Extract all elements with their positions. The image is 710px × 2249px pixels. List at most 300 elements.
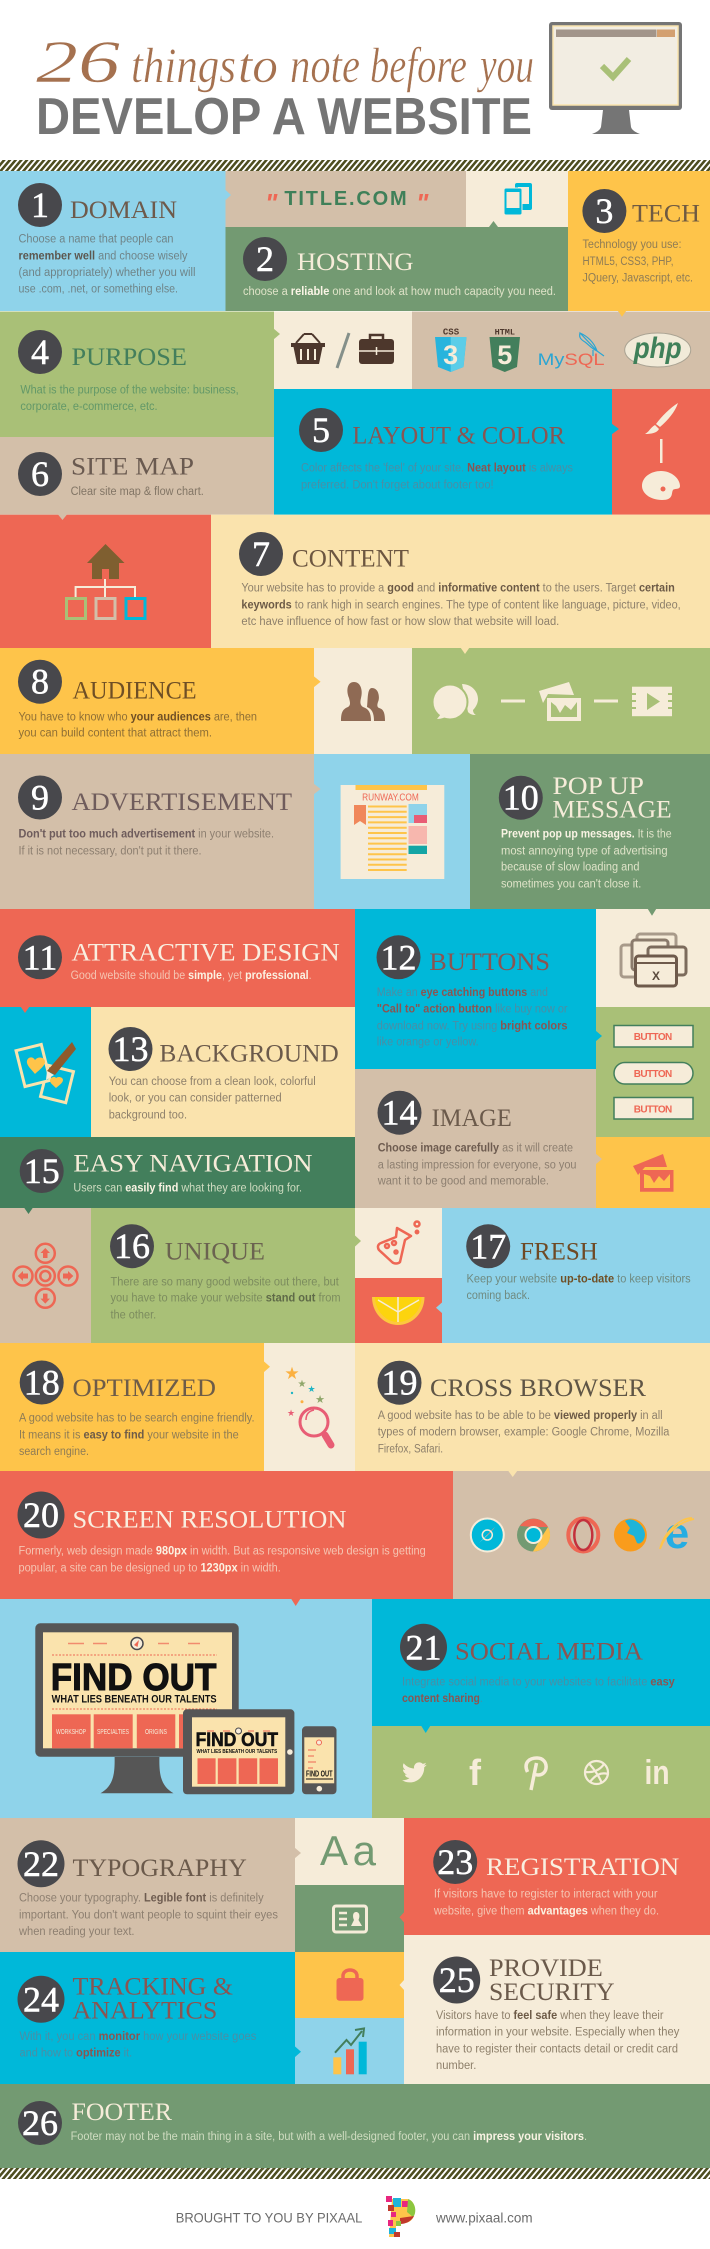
text: background body: background too. — [109, 1109, 187, 1121]
heading: cross browser: CROSS BROWSER — [430, 1375, 646, 1402]
heading: social media: SOCIAL MEDIA — [455, 1638, 643, 1665]
arrow: security left — [400, 1980, 404, 1990]
text: fresh body: coming back. — [466, 1290, 530, 1302]
arrow: purpose right — [274, 328, 280, 340]
arrow: image right — [596, 1154, 602, 1164]
icon: monitor with check mark — [549, 22, 682, 134]
heading: attractive design: ATTRACTIVE DESIGN — [72, 940, 340, 967]
icon: css3 — [435, 328, 466, 372]
heading: buttons: BUTTONS — [429, 949, 550, 976]
heading: site map: SITE MAP — [71, 453, 194, 480]
panel: lemon icon — [355, 1278, 442, 1343]
bottom striped divider — [0, 2168, 710, 2179]
icon: facebook: f — [469, 1752, 482, 1793]
arrow: hosting to phones — [489, 221, 498, 227]
number badge 3: 3 — [595, 191, 613, 231]
icon: stars: ★ — [298, 1379, 307, 1390]
title line: 26 things to note before you: things — [131, 37, 236, 93]
text: image body: want it to be good and memorable. — [377, 1175, 549, 1187]
device: desktop monitor: FIND OUT — [51, 1657, 217, 1699]
text: unique body: you have to make your website stand out from — [110, 1293, 341, 1305]
text: cross browser body: types of modern browser, example: Google Chrome, Mozilla — [378, 1427, 670, 1439]
icon: chrome — [517, 1518, 550, 1552]
panel: 2 hosting — [226, 227, 568, 311]
device: desktop monitor — [35, 1623, 239, 1793]
text: unique body: There are so many good website out there, but — [110, 1276, 340, 1288]
icon: linkedin: in — [644, 1754, 670, 1792]
icon: people — [341, 682, 385, 721]
text: easy navigation body: Users can easily find what they are looking for. — [73, 1183, 302, 1195]
panel: purpose icons — [274, 312, 412, 389]
text: image body: Choose image carefully as it will create — [378, 1143, 573, 1155]
number badge 6 — [18, 452, 62, 496]
arrow: domain to title — [225, 190, 231, 200]
text: image body: a lasting impression for everyone, so you — [378, 1159, 576, 1171]
text: screen resolution body: Formerly, web design made 980px in width. But as responsive web design is getting — [18, 1546, 426, 1558]
device: desktop monitor: ORIGINS — [145, 1729, 167, 1736]
text: cross browser body: A good website has to be able to be viewed properly in all — [378, 1410, 663, 1422]
arrow: registration left — [400, 1912, 404, 1923]
icon: image — [633, 1154, 674, 1192]
number badge 20: 20 — [23, 1495, 59, 1535]
arrow: optimized right — [264, 1361, 270, 1372]
panel: 13 background — [91, 1007, 355, 1137]
text: domain body: use .com, .net, or something else. — [18, 284, 178, 296]
icon: navigation arrows — [14, 1244, 78, 1308]
panel: 4 purpose — [0, 312, 274, 437]
icon: stars: ★ — [315, 1394, 325, 1406]
panel: button samples — [596, 1007, 710, 1137]
panel: image icon — [596, 1137, 710, 1208]
heading: purpose: PURPOSE — [72, 344, 187, 371]
number badge 2: 2 — [256, 239, 274, 279]
connector line — [660, 439, 662, 463]
text: buttons body: "Call to" action button like buy now or — [377, 1004, 568, 1016]
device: tablet: FIND OUT — [196, 1730, 278, 1751]
text: title.com: " — [416, 188, 429, 218]
text: tech body: Technology you use: — [582, 239, 682, 251]
icon: web page with ads — [341, 785, 444, 879]
number badge 13: 13 — [112, 1029, 148, 1069]
number badge 2 — [243, 237, 287, 281]
panel: 12 buttons — [355, 909, 596, 1069]
title line: 26 things to note before you: before — [370, 37, 467, 93]
icon: php: php — [633, 332, 682, 365]
panel: search icon — [264, 1343, 355, 1471]
panel: 25 provide security — [404, 1935, 710, 2084]
text: domain body: remember well and choose wisely — [18, 250, 188, 262]
number badge 24: 24 — [23, 1979, 59, 2019]
arrow: attractive down — [20, 1006, 30, 1013]
text: background body — [109, 1076, 316, 1121]
title line: 26 things to note before you — [36, 29, 534, 95]
panel: 7 content — [211, 515, 710, 648]
icon: stars: ★ — [284, 1364, 300, 1383]
text: fresh body — [466, 1273, 691, 1302]
icon: flask — [378, 1222, 420, 1264]
text: pop up body — [501, 829, 672, 890]
panel: 21 social media — [372, 1599, 710, 1726]
text: layout body: preferred. Don't forget about footer too! — [301, 479, 494, 491]
text: pop up body: most annoying type of advertising — [501, 845, 668, 857]
panel: 23 registration — [404, 1818, 710, 1935]
heading: registration: REGISTRATION — [486, 1854, 679, 1881]
text: typography body — [18, 1893, 278, 1938]
text: domain body: (and appropriately) whether you will — [18, 267, 196, 279]
text: social media body — [402, 1677, 675, 1705]
heading: background: BACKGROUND — [159, 1041, 339, 1068]
icon: image — [539, 682, 581, 721]
icon: mysql: MySQL — [538, 350, 605, 369]
icon: site map tree — [66, 544, 145, 618]
panel: 5 layout and color — [274, 389, 612, 515]
title line: 26 things to note before you: 26 — [36, 29, 120, 95]
heading: unique: UNIQUE — [165, 1238, 265, 1265]
icon: lemon slice — [372, 1297, 424, 1325]
text: advertisement body: If it is not necessary, don't put it there. — [18, 845, 202, 857]
arrow: tracking right — [294, 2046, 301, 2058]
text: fresh body: Keep your website up-to-date to keep visitors — [466, 1273, 691, 1285]
text: social media body: Integrate social media to your websites to facilitate easy — [402, 1677, 675, 1689]
panel: brush and palette icons — [612, 389, 710, 515]
text: optimized body — [19, 1413, 254, 1458]
icon: video — [632, 687, 672, 716]
button sample 3: BUTTON — [634, 1104, 672, 1116]
text: typography body: important. You don't want people to squint their eyes — [19, 1909, 278, 1921]
text: typography body: when reading your text. — [18, 1926, 134, 1938]
text: screen resolution body: popular, a site can be designed up to 1230px in width. — [18, 1562, 281, 1574]
number badge 10: 10 — [503, 778, 539, 818]
text: optimized body: search engine. — [19, 1446, 89, 1458]
icon: brush — [645, 403, 678, 434]
icon: basket — [291, 334, 325, 364]
number badge 6: 6 — [31, 454, 49, 494]
panel: 14 image — [355, 1069, 596, 1208]
number badge 14: 14 — [382, 1093, 418, 1133]
heading: optimized: OPTIMIZED — [72, 1375, 216, 1402]
text: layout body — [301, 463, 573, 491]
text: site map body: Clear site map & flow chart. — [71, 486, 204, 498]
dash — [501, 700, 525, 702]
icon: web page with ads: RUNWAY.COM — [362, 792, 419, 804]
number badge 3 — [582, 189, 626, 233]
text: content body — [241, 583, 681, 628]
panel: 6 site map — [0, 437, 274, 515]
text: pop up body: sometimes you can't close it. — [501, 878, 641, 890]
arrows between panels — [20, 190, 656, 2058]
logo: pixaal P — [386, 2196, 415, 2237]
panel: background icon — [0, 1007, 91, 1137]
text: background body: look, or you can consider patterned — [109, 1093, 282, 1105]
number badge 22: 22 — [23, 1844, 59, 1884]
text: tracking body: With it, you can monitor how your website goes — [20, 2031, 257, 2043]
panel: 1 domain — [0, 171, 226, 311]
panel: 20 screen resolution — [0, 1471, 453, 1599]
slash — [337, 333, 349, 368]
arrow: content down — [460, 648, 470, 654]
panel: advertisement page icon — [314, 754, 470, 909]
icon: magnifier — [300, 1408, 331, 1445]
heading: tracking and analytics — [72, 1973, 233, 2024]
panel: navigation icon — [0, 1208, 91, 1343]
button sample 2: BUTTON — [634, 1069, 672, 1080]
text: background body: You can choose from a clean look, colorful — [109, 1076, 316, 1088]
panel: technology logos — [412, 312, 710, 389]
number badge 5: 5 — [312, 410, 330, 450]
device: tablet: WHAT LIES BENEATH OUR TALENTS — [196, 1749, 277, 1755]
text: security body: have to register their contacts detail or credit card — [436, 2043, 678, 2055]
panel: audience people icon — [314, 648, 412, 754]
panel: 17 fresh — [442, 1208, 710, 1343]
icon: dribbble — [585, 1761, 608, 1784]
icon: stars — [284, 1364, 325, 1418]
heading: pop up message: MESSAGE — [552, 797, 672, 824]
icon: html5: HTML — [495, 328, 515, 338]
heading: tracking and analytics: ANALYTICS — [72, 1997, 217, 2024]
text: hosting body: choose a reliable one and look at how much capacity you need. — [243, 286, 556, 298]
text: advertisement body — [18, 829, 274, 857]
text: purpose body: What is the purpose of the website: business, — [20, 384, 239, 396]
text: purpose body: corporate, e-commerce, etc. — [20, 401, 158, 413]
number badge 9: 9 — [31, 778, 49, 818]
text: tracking body: and how to optimize it. — [20, 2048, 132, 2060]
icon: lock — [336, 1970, 364, 2001]
panel: site map icon — [0, 515, 211, 648]
title line: 26 things to note before you: note — [290, 37, 360, 93]
number badge 18: 18 — [24, 1362, 60, 1402]
text: content body: Your website has to provide a good and informative content to the users. Target certain — [241, 583, 675, 595]
panel: registration icon — [295, 1885, 404, 1952]
text: unique body — [110, 1276, 341, 1321]
panel: 11 attractive design — [0, 909, 355, 1007]
number badge 23: 23 — [437, 1842, 473, 1882]
icon: pictures with brush — [16, 1042, 76, 1103]
panel: analytics icon — [295, 2018, 404, 2084]
panel: 26 footer — [0, 2084, 710, 2168]
header: title and monitor — [36, 22, 682, 146]
panel: 19 cross browser — [355, 1343, 710, 1471]
icon: mysql — [538, 333, 605, 369]
text: cross browser body — [378, 1410, 670, 1455]
number badge 4: 4 — [31, 332, 49, 372]
number badge 25 — [433, 1956, 480, 2004]
panel: 8 audience — [0, 648, 314, 754]
panel: typography icon — [295, 1818, 404, 1885]
number badge 11: 11 — [23, 937, 57, 977]
panel: 18 optimized — [0, 1343, 264, 1471]
icon: twitter — [402, 1762, 427, 1782]
text: registration body: If visitors have to register to interact with your — [434, 1889, 658, 1901]
number badge 1: 1 — [31, 185, 49, 225]
panel: social icons — [372, 1726, 710, 1818]
text: attractive body: Good website should be simple, yet professional. — [71, 970, 312, 982]
panel: 22 typography — [0, 1818, 295, 1952]
heading: advertisement: ADVERTISEMENT — [72, 789, 292, 816]
heading: provide security: SECURITY — [489, 1979, 615, 2006]
icon: css3: CSS — [443, 328, 460, 338]
panel: browser icons — [453, 1471, 710, 1599]
device: desktop monitor: SPECIALTIES — [97, 1729, 129, 1736]
panel: lock icon — [295, 1952, 404, 2018]
heading: domain: DOMAIN — [70, 197, 177, 224]
icon: speech bubbles — [432, 684, 478, 720]
arrow: cross browser down — [508, 1470, 518, 1477]
heading: typography: TYPOGRAPHY — [72, 1855, 247, 1882]
top striped divider — [0, 160, 710, 171]
icon: stars: ★ — [287, 1408, 295, 1418]
number badge 9 — [18, 776, 62, 820]
heading: screen resolution: SCREEN RESOLUTION — [72, 1506, 346, 1533]
title line: DEVELOP A WEBSITE: DEVELOP A WEBSITE — [36, 88, 532, 146]
title line: 26 things to note before you: you — [476, 37, 534, 93]
icon: bar chart with trend — [333, 2028, 367, 2074]
icon: internet explorer: e — [665, 1509, 689, 1558]
text: registration body — [433, 1889, 659, 1917]
text: content body: keywords to rank high in search engines. The type of content like language, picture, video, — [241, 599, 681, 611]
heading: image: IMAGE — [432, 1105, 512, 1132]
number badge 15: 15 — [24, 1151, 60, 1191]
text: layout body: Color affects the 'feel' of your site. Neat layout is always — [301, 463, 573, 475]
icon: briefcase — [359, 335, 394, 364]
heading: footer: FOOTER — [72, 2099, 172, 2126]
credit: website url: www.pixaal.com — [435, 2209, 533, 2225]
icon: id card — [334, 1906, 366, 1932]
panel: 9 advertisement — [0, 754, 314, 909]
icon: css3: 3 — [443, 340, 458, 370]
device: desktop monitor: WHAT LIES BENEATH OUR TALENTS — [52, 1694, 217, 1706]
number badge 21 — [400, 1624, 447, 1671]
number badge 20 — [18, 1492, 64, 1538]
text: security body — [436, 2010, 680, 2072]
icon: phones — [504, 183, 532, 215]
icon: pinterest — [526, 1758, 546, 1790]
arrow: typography right — [294, 1848, 301, 1858]
icon: safari — [471, 1518, 504, 1552]
icon: html5 — [490, 328, 520, 372]
text: purpose body — [20, 384, 239, 413]
number badge 25: 25 — [439, 1960, 475, 2000]
heading: easy navigation: EASY NAVIGATION — [73, 1151, 313, 1178]
heading: provide security — [489, 1955, 615, 2006]
arrow: fresh left — [436, 1302, 442, 1314]
heading: pop up message — [552, 773, 672, 824]
arrow: pop up down — [648, 908, 656, 916]
number badge 1 — [18, 183, 62, 227]
text: typography body: Choose your typography. Legible font is definitely — [19, 1893, 264, 1905]
device: tablet — [183, 1709, 294, 1794]
icon: palette — [642, 471, 680, 500]
text: content body: etc have influence of how fast or how slow that website will load. — [241, 616, 559, 628]
text: domain body: Choose a name that people can — [18, 234, 174, 246]
text: tech body: JQuery, Javascript, etc. — [582, 273, 693, 285]
heading: layout and color: LAYOUT & COLOR — [352, 422, 565, 449]
heading: pop up message: POP UP — [552, 773, 644, 800]
icon: html5: 5 — [497, 340, 512, 370]
text: pop up body: Prevent pop up messages. It is the — [501, 829, 672, 841]
text: tracking body — [20, 2031, 257, 2060]
text: footer body: Footer may not be the main thing in a site, but with a well-designed footer, you can impress your visitors. — [71, 2131, 587, 2143]
text: security body: number. — [436, 2060, 476, 2072]
heading: tech: TECH — [632, 201, 700, 228]
text: security body: information in your website. Especially when they — [436, 2027, 680, 2039]
text: image body — [377, 1143, 576, 1187]
number badge 4 — [18, 330, 62, 374]
number badge 16: 16 — [114, 1226, 150, 1266]
panel: windows icon — [596, 909, 710, 1007]
text: unique body: the other. — [110, 1309, 156, 1321]
number badge 26: 26 — [22, 2103, 58, 2143]
number badge 8 — [18, 660, 62, 704]
number badge 8: 8 — [31, 662, 49, 702]
arrow: buttons right — [596, 1030, 602, 1042]
text: audience body — [18, 711, 257, 740]
dash — [594, 700, 618, 702]
text: cross browser body: Firefox, Safari. — [378, 1443, 443, 1455]
panel: 10 pop up message — [470, 754, 710, 909]
arrow: easy navigation down — [24, 1208, 33, 1214]
icon: Aa: Aa — [320, 1827, 377, 1874]
icon: opera — [568, 1518, 598, 1552]
text: audience body: You have to know who your audiences are, then — [18, 711, 257, 723]
text: tech body — [582, 239, 693, 285]
text: title.com — [265, 188, 429, 218]
heading: fresh: FRESH — [520, 1238, 598, 1265]
text: optimized body: A good website has to be search engine friendly. — [19, 1413, 254, 1425]
device: phone: FIND OUT — [306, 1770, 333, 1779]
text: audience body: you can build content that attract them. — [18, 728, 212, 740]
text: security body: Visitors have to feel safe when they leave their — [436, 2010, 664, 2022]
text: buttons body: download now. Try using bright colors — [377, 1020, 568, 1032]
number badge 12: 12 — [380, 937, 416, 977]
device: phone — [302, 1726, 336, 1794]
arrow: social media down — [421, 1726, 430, 1733]
panel: title.com — [226, 171, 466, 227]
panel: 16 unique — [91, 1208, 355, 1343]
text: advertisement body: Don't put too much advertisement in your website. — [18, 829, 274, 841]
number badge 22 — [18, 1840, 64, 1887]
text: buttons body: Make an eye catching buttons and — [377, 987, 548, 999]
heading: hosting: HOSTING — [297, 249, 414, 276]
arrow: audience right — [314, 676, 321, 688]
device: desktop monitor: WORKSHOP — [56, 1729, 86, 1736]
panel: phones icon — [466, 171, 568, 227]
arrow: unique right — [354, 1235, 361, 1247]
number badge 21: 21 — [406, 1627, 442, 1667]
panel: 15 easy navigation — [0, 1137, 355, 1208]
heading: content: CONTENT — [292, 546, 409, 573]
text: buttons body: like orange or yellow. — [377, 1037, 479, 1049]
number badge 7: 7 — [252, 534, 270, 574]
icon: firefox — [614, 1518, 647, 1552]
text: tech body: HTML5, CSS3, PHP, — [582, 256, 674, 268]
text: domain body — [18, 234, 196, 296]
arrow: site map down — [58, 514, 67, 520]
text: screen resolution body — [18, 1546, 426, 1574]
number badge 24 — [18, 1976, 64, 2023]
number badge 7 — [239, 532, 283, 576]
number badge 5 — [299, 408, 343, 452]
panel: flask icon — [355, 1208, 442, 1278]
icon: stars: ★ — [308, 1384, 316, 1394]
credit: brought to you by pixaal: BROUGHT TO YOU BY PIXAAL — [176, 2209, 362, 2225]
heading: provide security: PROVIDE — [489, 1955, 603, 1982]
icon: stacked windows: X — [652, 969, 660, 983]
heading: tracking and analytics: TRACKING & — [72, 1973, 233, 2000]
text: title.com: TITLE.COM — [284, 188, 407, 210]
title line: 26 things to note before you: to — [238, 37, 278, 93]
number badge 17: 17 — [470, 1226, 506, 1266]
panel: audience media icons — [412, 648, 710, 754]
